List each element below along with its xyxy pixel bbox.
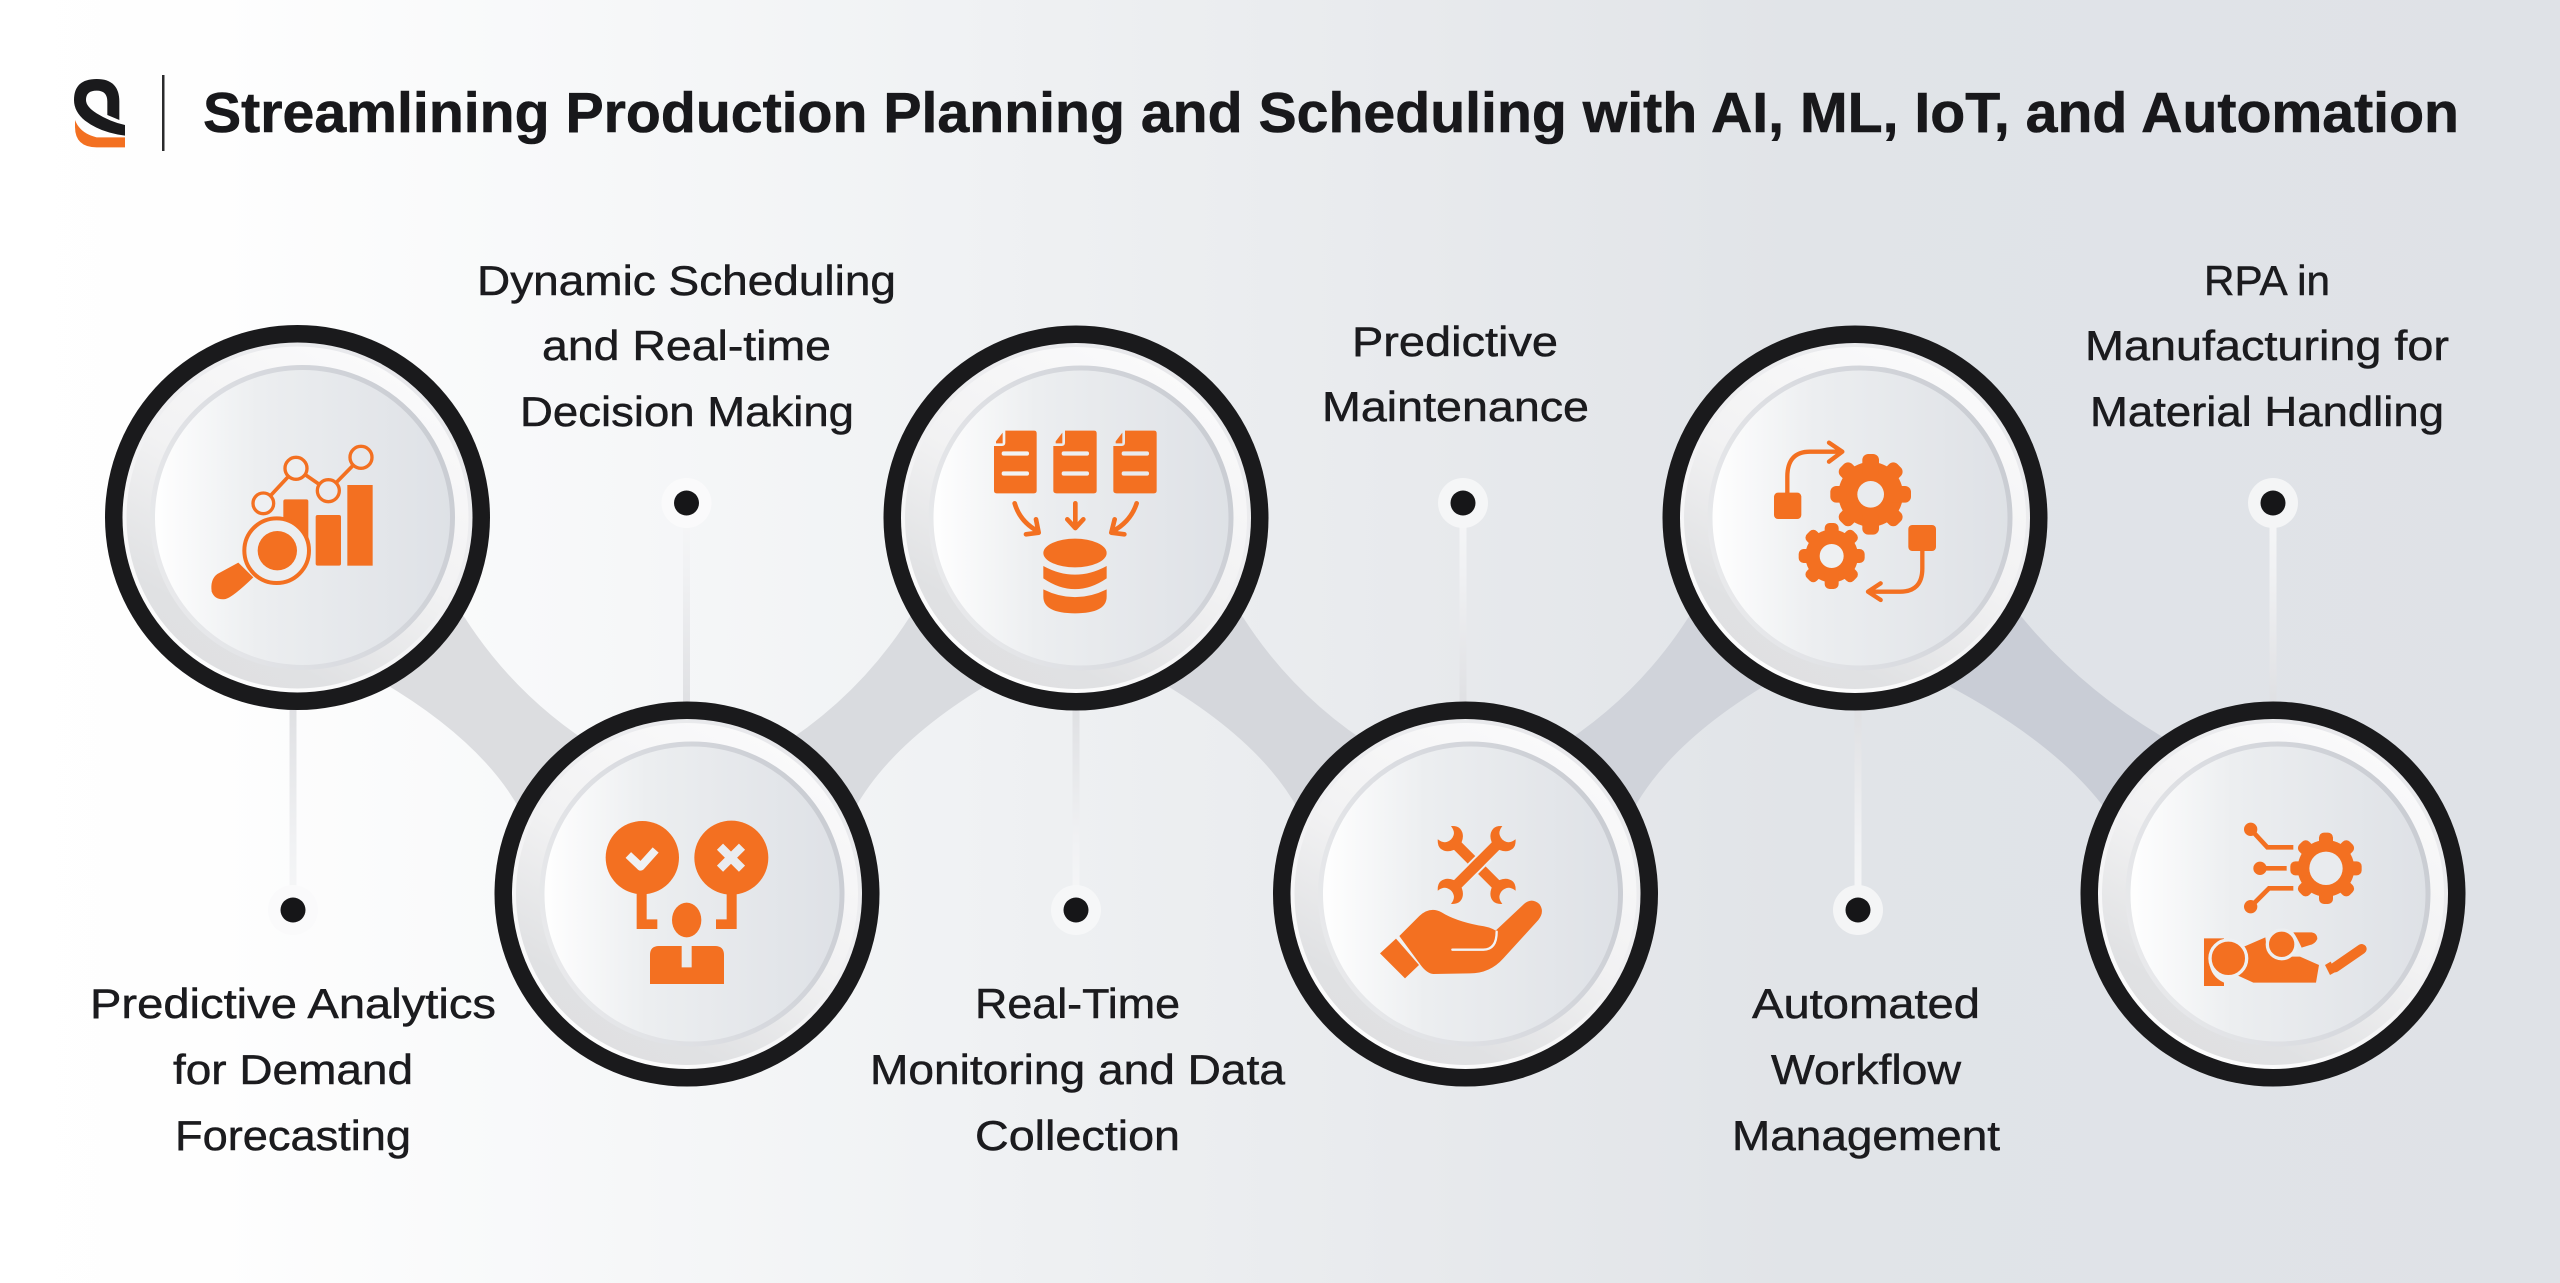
label: predictive maintenance: Predictive — [1352, 318, 1558, 365]
label: automated workflow — [1732, 980, 2000, 1159]
label: RPA: Material Handling — [2090, 388, 2444, 435]
label: RPA — [2085, 257, 2449, 435]
label: predictive analytics: for Demand — [173, 1046, 413, 1093]
label: dynamic scheduling: Decision Making — [520, 388, 854, 435]
label: real-time monitoring: Collection — [975, 1112, 1180, 1159]
connector 5 to 6 — [1928, 590, 2186, 810]
pin: RPA — [2248, 478, 2298, 528]
circle 6: RPA — [2080, 702, 2466, 1086]
stem lines and pin dots — [268, 478, 2298, 935]
label: RPA: Manufacturing for — [2085, 322, 2449, 369]
label: automated workflow: Management — [1732, 1112, 2000, 1159]
pin: predictive analytics — [268, 885, 318, 935]
label: dynamic scheduling: and Real-time — [542, 322, 831, 369]
icon: robot arm with gear — [2204, 823, 2362, 986]
label: predictive maintenance — [1322, 318, 1589, 430]
icon: hand with wrenches — [1380, 823, 1542, 978]
icon: gears with arrows — [1774, 443, 1936, 600]
pin: predictive maintenance — [1438, 478, 1488, 528]
circle 5: automated workflow — [1662, 326, 2048, 710]
circle 1: predictive analytics — [105, 325, 490, 710]
icon: documents to database — [994, 431, 1157, 613]
icon: magnifier over chart — [211, 446, 373, 599]
logo — [74, 79, 125, 147]
stem: RPA — [2270, 503, 2276, 705]
label: predictive analytics: Forecasting — [175, 1112, 411, 1159]
icon: decision person — [606, 821, 768, 984]
label: dynamic scheduling: Dynamic Scheduling — [477, 257, 896, 304]
stem: predictive analytics — [290, 708, 296, 908]
label: real-time monitoring — [870, 980, 1286, 1159]
pin: dynamic scheduling — [662, 478, 712, 528]
title: Streamlining Production Planning and Scheduling with AI, ML, IoT, and Automation — [203, 81, 2459, 145]
label: RPA: RPA in — [2204, 257, 2330, 304]
stem: real-time monitoring — [1072, 708, 1080, 908]
connector 2 to 3 — [774, 590, 1004, 810]
stem: predictive maintenance — [1460, 503, 1466, 705]
circle 4: predictive maintenance — [1273, 702, 1658, 1086]
header divider — [162, 75, 164, 151]
label: predictive analytics: Predictive Analytics — [90, 980, 496, 1027]
connector 4 to 5 — [1553, 590, 1783, 810]
label: real-time monitoring: Real-Time — [975, 980, 1180, 1027]
label: predictive maintenance: Maintenance — [1322, 383, 1589, 430]
connector 1 to 2 — [370, 590, 600, 810]
circle 2: dynamic scheduling — [494, 702, 880, 1086]
label: automated workflow: Automated — [1752, 980, 1980, 1027]
label: real-time monitoring: Monitoring and Data — [870, 1046, 1286, 1093]
label: automated workflow: Workflow — [1771, 1046, 1962, 1093]
pin: real-time monitoring — [1051, 885, 1101, 935]
stem: automated workflow — [1854, 708, 1862, 908]
label: dynamic scheduling — [477, 257, 896, 435]
label: predictive analytics — [90, 980, 496, 1159]
circle 3: real-time monitoring — [884, 326, 1268, 710]
pin: automated workflow — [1833, 885, 1883, 935]
connectors between circles — [370, 590, 2186, 810]
connector 3 to 4 — [1148, 590, 1378, 810]
stem: dynamic scheduling — [683, 503, 690, 705]
